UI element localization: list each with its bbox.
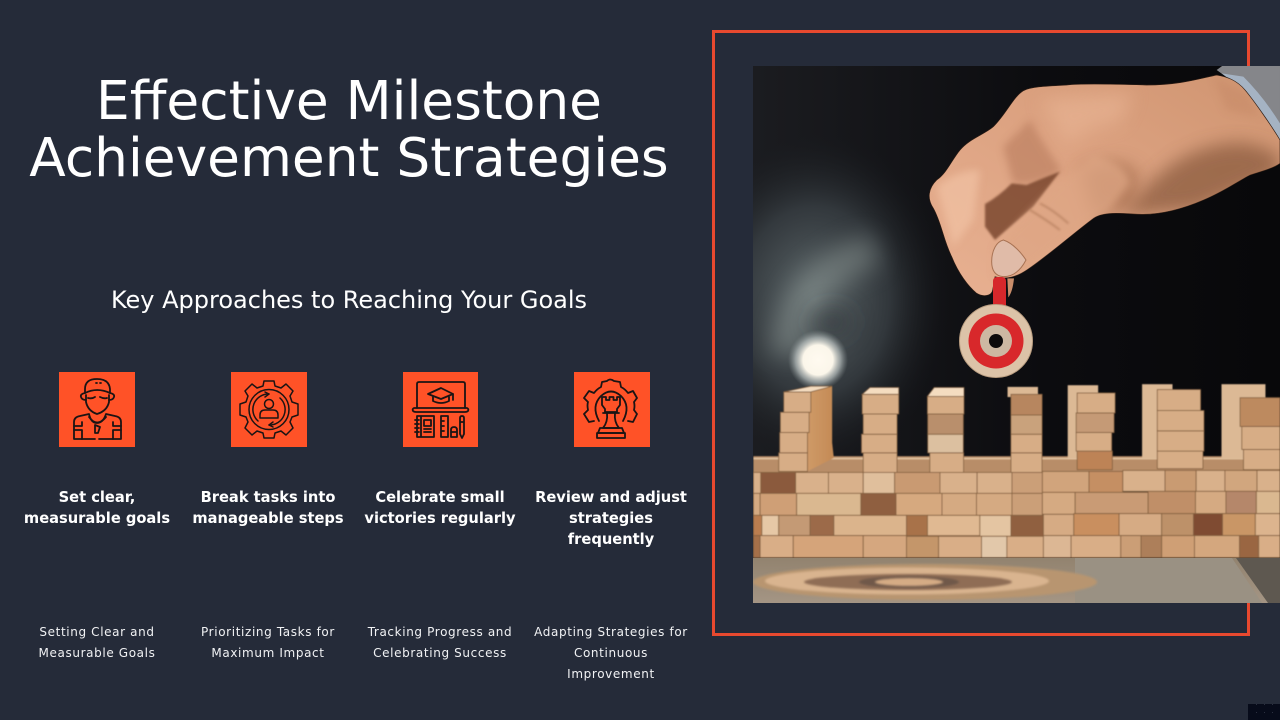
heading: celebrate: Celebrate small [375,489,505,506]
wooden block wall [753,384,1280,558]
heading: set goals [24,489,170,527]
description: prioritizing: Maximum Impact [211,646,325,660]
heading: set goals: Set clear, [59,489,135,506]
icon: laptop with graduation cap and study tools [403,372,478,447]
dark backdrop with glow [753,66,1280,558]
title [29,69,669,189]
description: goals: Setting Clear and [39,625,155,639]
title: Effective Milestone [96,69,602,132]
row 4 [753,536,1280,558]
heading: break tasks: Break tasks into [201,489,335,506]
towers [779,386,1280,473]
row 1 [753,470,1280,493]
heading: break tasks: manageable steps [192,510,344,527]
description: goals [38,625,156,660]
heading: break tasks [192,489,344,527]
description: tracking: Tracking Progress and [368,625,512,639]
description: adapting: Improvement [567,667,655,681]
ghost blocks behind towers [1008,384,1265,459]
heading: celebrate [364,489,516,527]
icon: chess rook in gear [574,372,650,447]
title: Achievement Strategies [29,126,669,189]
heading: set goals: measurable goals [24,510,170,527]
description: adapting: Adapting Strategies for [534,625,688,639]
description: tracking: Celebrating Success [373,646,507,660]
description: adapting: Continuous [574,646,648,660]
description: prioritizing: Prioritizing Tasks for [201,625,335,639]
description: prioritizing [201,625,335,660]
description: tracking [368,625,512,660]
heading: review [535,489,687,548]
hand [929,63,1280,297]
heading: review: frequently [568,531,654,548]
description: adapting [534,625,688,681]
heading: review: strategies [569,510,653,527]
wooden floor with blurred target [753,558,1280,603]
row 3 [753,514,1280,536]
heading: review: Review and adjust [535,489,687,506]
corner pattern block [1248,704,1280,720]
heading: celebrate: victories regularly [364,510,516,527]
icon: gear with person [231,372,307,447]
row 2 [753,491,1280,515]
subtitle: Key Approaches to Reaching Your Goals [111,286,587,314]
description: goals: Measurable Goals [38,646,156,660]
target held by hand [960,277,1032,378]
icon: worker with cap [59,372,135,447]
photo: hand placing target on wooden blocks [753,66,1280,603]
orange photo frame [712,30,1250,636]
